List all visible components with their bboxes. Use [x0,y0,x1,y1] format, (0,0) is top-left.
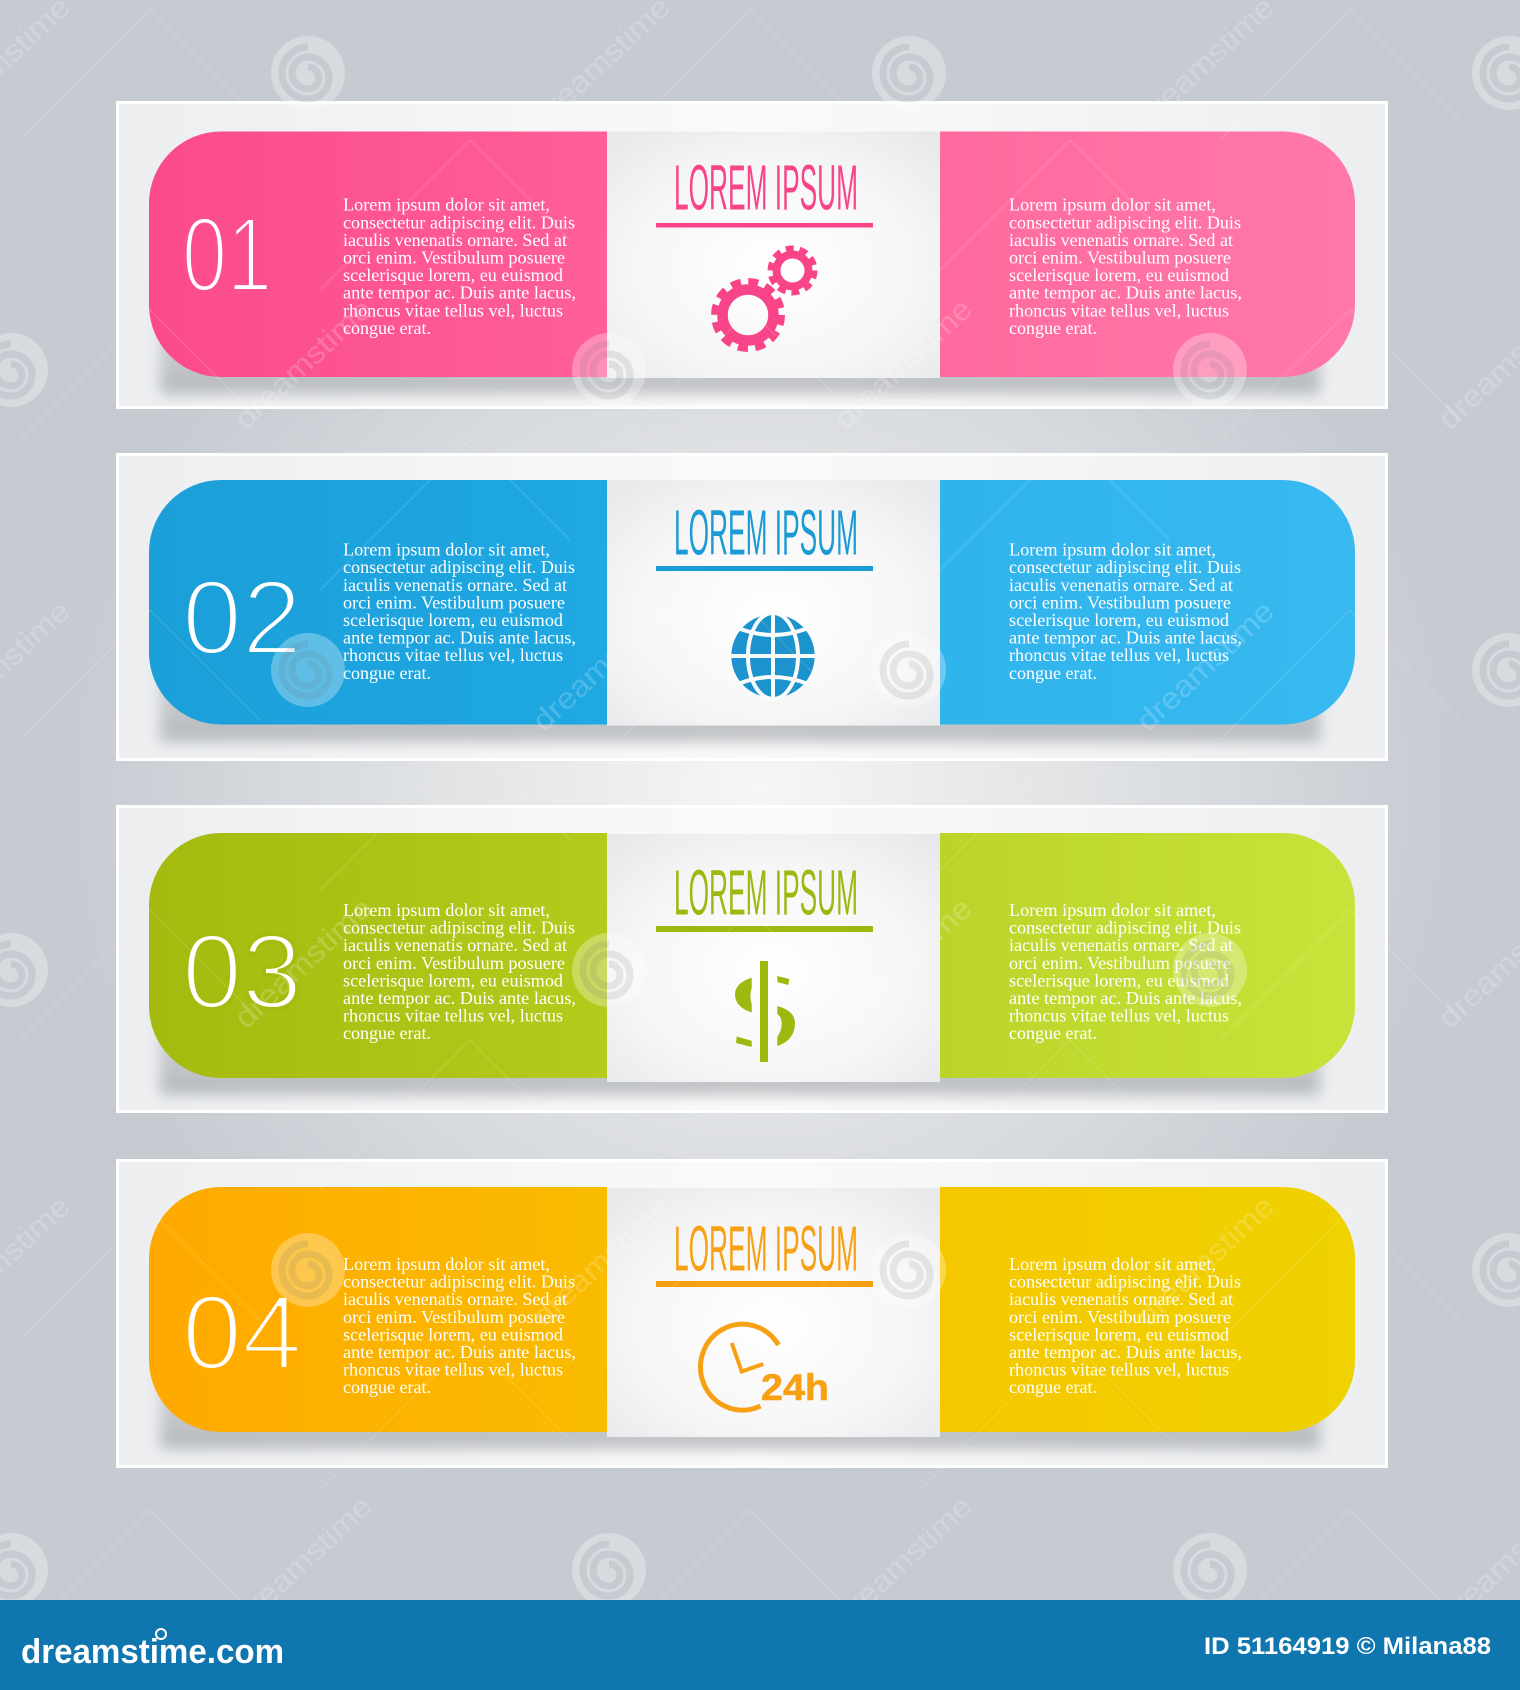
icon: globe [729,612,817,700]
text block 03 left: consectetur adipiscing elit. Duis [343,918,575,938]
panel: 03 green: LOREM IPSUM [674,856,858,928]
text block 01 right: congue erat. [1009,318,1097,338]
text block 03 right [1009,900,1242,1043]
left segment 04 [149,1187,607,1432]
pill shadow 01 [160,180,1320,394]
heading rule 02 [656,566,873,571]
panel: 02 blue: LOREM IPSUM [674,496,858,568]
text block 03 left [343,900,576,1043]
text block 02 right [1009,540,1242,683]
text block 03 left: ante tempor ac. Duis ante lacus, [343,988,576,1008]
text block 01 left [343,195,576,338]
left segment 01 [149,132,607,377]
watermark overlay: dreamstime [228,1490,379,1633]
text block 03 left: orci enim. Vestibulum posuere [343,953,565,973]
text block 03 right: iaculis venenatis ornare. Sed at [1009,935,1233,955]
text block 02 right: iaculis venenatis ornare. Sed at [1009,575,1233,595]
text block 03 right: Lorem ipsum dolor sit amet, [1009,900,1216,920]
center card 02 [607,480,940,726]
text block 01 right: iaculis venenatis ornare. Sed at [1009,230,1233,250]
footer bar [0,1600,1520,1690]
text block 02 right: ante tempor ac. Duis ante lacus, [1009,628,1242,648]
text block 03 left: Lorem ipsum dolor sit amet, [343,900,550,920]
text block 01 right: ante tempor ac. Duis ante lacus, [1009,283,1242,303]
right segment 01 [940,132,1355,377]
panel frame 03 [118,806,1386,1112]
watermark overlay: dreamstime [828,293,979,436]
text block 02 left: orci enim. Vestibulum posuere [343,592,565,612]
text block 01 left: consectetur adipiscing elit. Duis [343,212,575,232]
watermark overlay: dreamstime [228,892,379,1035]
text block 02 right: consectetur adipiscing elit. Duis [1009,557,1241,577]
number 02: 02 [182,559,302,677]
text block 01 left: orci enim. Vestibulum posuere [343,247,565,267]
watermark overlay: dreamstime [526,0,677,134]
icon: clock 24h: 24h [761,1367,829,1408]
watermark overlay: dreamstime [1130,1190,1281,1333]
center card 04 [607,1188,940,1437]
text block 04 right: ante tempor ac. Duis ante lacus, [1009,1342,1242,1362]
panel: 04 orange [118,1160,1386,1466]
text block 02 left [343,540,576,683]
text block 04 right: iaculis venenatis ornare. Sed at [1009,1289,1233,1309]
text block 04 right: orci enim. Vestibulum posuere [1009,1307,1231,1327]
watermark overlay: dreamstime [828,1490,979,1633]
text block 04 right: congue erat. [1009,1377,1097,1397]
text block 04 right: consectetur adipiscing elit. Duis [1009,1272,1241,1292]
pill shadow 03 [160,881,1320,1095]
icon: clock 24h [701,1324,829,1410]
text block 04 right: Lorem ipsum dolor sit amet, [1009,1254,1216,1274]
pill shadow 02 [160,528,1320,742]
text block 03 right: orci enim. Vestibulum posuere [1009,953,1231,973]
left segment 03 [149,833,607,1078]
watermark overlay: dreamstime [526,595,677,738]
text block 01 right: consectetur adipiscing elit. Duis [1009,212,1241,232]
right segment 02 [940,480,1355,724]
text block 03 left: scelerisque lorem, eu euismod [343,970,563,990]
text block 03 right: congue erat. [1009,1023,1097,1043]
text block 03 left: iaculis venenatis ornare. Sed at [343,935,567,955]
footer credit: ID 51164919 © Milana88 [1204,1633,1491,1660]
text block 01 left: rhoncus vitae tellus vel, luctus [343,300,563,320]
text block 01 right: scelerisque lorem, eu euismod [1009,265,1229,285]
text block 01 right: orci enim. Vestibulum posuere [1009,247,1231,267]
panel frame 04 [118,1160,1386,1466]
text block 02 left: iaculis venenatis ornare. Sed at [343,575,567,595]
panel: 01 pink: LOREM IPSUM [674,152,858,224]
text block 02 left: scelerisque lorem, eu euismod [343,610,563,630]
panel frame 02 [118,454,1386,760]
text block 02 right: rhoncus vitae tellus vel, luctus [1009,645,1229,665]
text block 01 right: rhoncus vitae tellus vel, luctus [1009,300,1229,320]
text block 04 left [343,1254,576,1397]
text block 01 left: iaculis venenatis ornare. Sed at [343,230,567,250]
text block 02 left: Lorem ipsum dolor sit amet, [343,540,550,560]
panel: 02 blue [118,454,1386,760]
text block 01 left: scelerisque lorem, eu euismod [343,265,563,285]
icon: gears [715,248,814,348]
text block 01 right [1009,195,1242,338]
watermark overlay: dreamstime [1130,0,1281,134]
watermark overlay: dreamstime [228,293,379,436]
footer logo spiral [156,1629,166,1639]
watermark overlay: dreamstime [828,892,979,1035]
center card 01 [607,132,940,378]
footer logo: dreamstime.com [21,1633,284,1671]
number 03: 03 [182,913,302,1031]
watermark overlay: dreamstime [526,1190,677,1333]
text block 04 left: consectetur adipiscing elit. Duis [343,1272,575,1292]
text block 04 left: congue erat. [343,1377,431,1397]
text block 04 left: iaculis venenatis ornare. Sed at [343,1289,567,1309]
text block 02 right: orci enim. Vestibulum posuere [1009,592,1231,612]
panel: 03 green [118,806,1386,1112]
text block 04 right: scelerisque lorem, eu euismod [1009,1324,1229,1344]
text block 02 left: ante tempor ac. Duis ante lacus, [343,628,576,648]
text block 01 right: Lorem ipsum dolor sit amet, [1009,195,1216,215]
text block 02 left: consectetur adipiscing elit. Duis [343,557,575,577]
text block 04 left: orci enim. Vestibulum posuere [343,1307,565,1327]
text block 03 right: consectetur adipiscing elit. Duis [1009,918,1241,938]
panel: 01 pink [118,102,1386,408]
text block 04 right [1009,1254,1242,1397]
text block 02 right: Lorem ipsum dolor sit amet, [1009,540,1216,560]
text block 02 left: congue erat. [343,663,431,683]
panel frame 01 [118,102,1386,408]
text block 04 left: scelerisque lorem, eu euismod [343,1324,563,1344]
right segment 03 [940,833,1355,1078]
heading rule 04 [656,1281,873,1287]
text block 04 left: ante tempor ac. Duis ante lacus, [343,1342,576,1362]
heading rule 01 [656,223,873,228]
text block 01 left: Lorem ipsum dolor sit amet, [343,195,550,215]
text block 01 left: ante tempor ac. Duis ante lacus, [343,283,576,303]
right segment 04 [940,1187,1355,1432]
icon: dollar sign [735,961,795,1062]
pill shadow 04 [160,1235,1320,1449]
text block 03 right: scelerisque lorem, eu euismod [1009,970,1229,990]
text block 03 right: ante tempor ac. Duis ante lacus, [1009,988,1242,1008]
text block 02 left: rhoncus vitae tellus vel, luctus [343,645,563,665]
text block 03 left: congue erat. [343,1023,431,1043]
text block 01 left: congue erat. [343,318,431,338]
text block 02 right: congue erat. [1009,663,1097,683]
text block 02 right: scelerisque lorem, eu euismod [1009,610,1229,630]
text block 03 left: rhoncus vitae tellus vel, luctus [343,1006,563,1026]
number 04: 04 [182,1274,302,1392]
text block 04 right: rhoncus vitae tellus vel, luctus [1009,1360,1229,1380]
number 01: 01 [182,196,272,314]
center card 03 [607,834,940,1082]
text block 04 left: Lorem ipsum dolor sit amet, [343,1254,550,1274]
text block 03 right: rhoncus vitae tellus vel, luctus [1009,1006,1229,1026]
heading rule 03 [656,926,873,932]
watermark overlay: dreamstime [1130,595,1281,738]
left segment 02 [149,480,607,724]
text block 04 left: rhoncus vitae tellus vel, luctus [343,1360,563,1380]
panel: 04 orange: LOREM IPSUM [674,1212,858,1284]
